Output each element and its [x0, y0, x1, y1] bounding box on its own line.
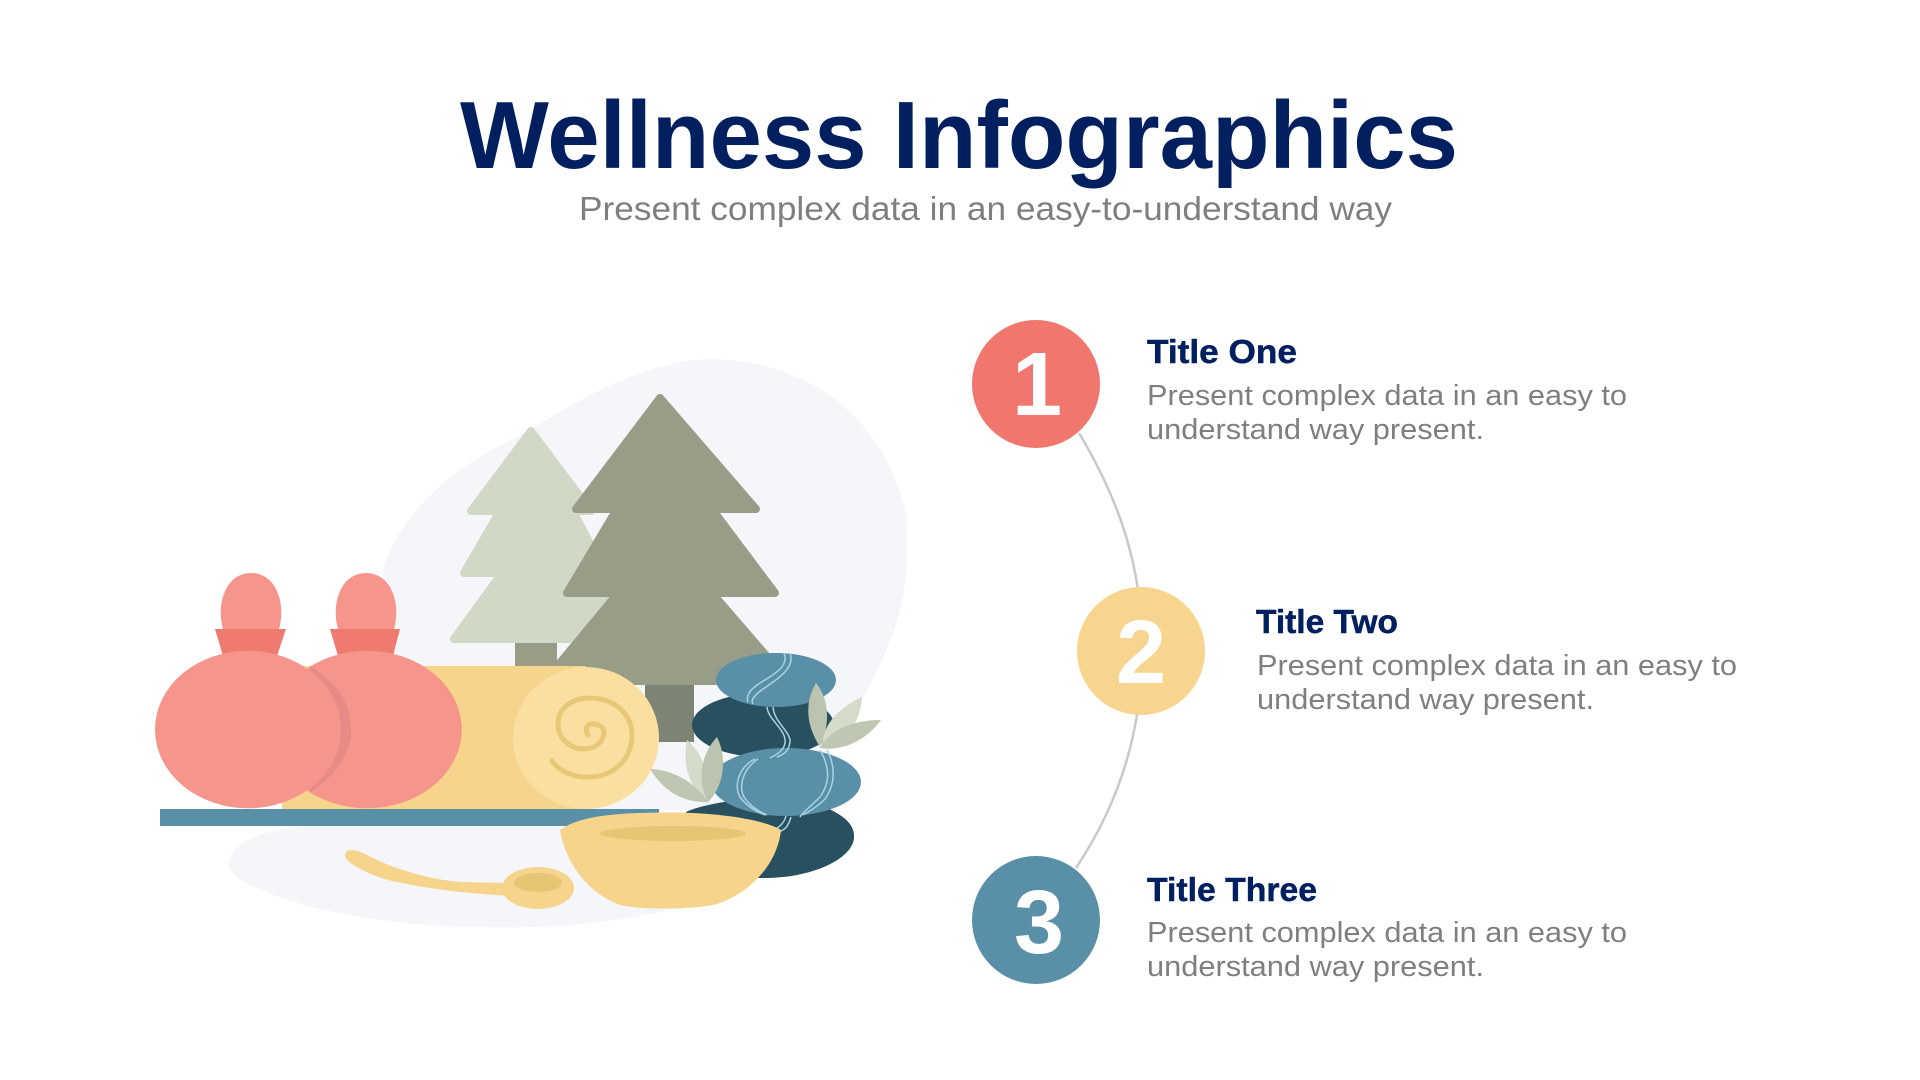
leaf	[650, 769, 708, 802]
top stone	[716, 653, 836, 707]
number badge 2	[1077, 587, 1205, 715]
number badge 1: 1	[1012, 335, 1062, 435]
spoon handle	[345, 850, 510, 896]
bowl body	[560, 812, 781, 909]
subtitle: Present complex data in an easy-to-understand way	[579, 190, 1393, 227]
step 2 title: Title Two	[1256, 603, 1398, 640]
leaf	[820, 720, 881, 749]
number badge 3	[972, 856, 1100, 984]
bottom stone	[686, 797, 854, 878]
step 2	[1077, 587, 1737, 716]
towel body	[282, 666, 586, 809]
light tree foliage	[454, 431, 640, 639]
title: Wellness Infographics	[460, 82, 1458, 189]
background blob	[383, 359, 907, 810]
rolled towel	[282, 666, 659, 809]
ball	[272, 651, 462, 808]
step 3 description: understand way present.	[1147, 951, 1484, 983]
left leaves	[650, 737, 723, 802]
spoon hollow	[514, 873, 562, 892]
spoon head	[502, 867, 574, 909]
cap	[221, 573, 281, 629]
cap	[336, 573, 396, 629]
leaf	[686, 740, 708, 802]
step 2 description: Present complex data in an easy to	[1257, 650, 1737, 682]
step 3	[972, 856, 1627, 984]
spoon	[345, 850, 574, 909]
connecting arc	[1076, 433, 1142, 868]
neck	[330, 629, 400, 656]
ball shadow	[310, 666, 351, 793]
number badge 3: 3	[1014, 873, 1064, 973]
dark tree trunk	[645, 682, 694, 742]
ground ellipse	[229, 826, 733, 927]
dark tree foliage	[545, 398, 788, 681]
stacked stones	[686, 653, 861, 878]
step 3 description: Present complex data in an easy to	[1147, 917, 1627, 949]
bowl	[560, 812, 781, 909]
towel roll end	[513, 667, 659, 809]
step 2 description: understand way present.	[1257, 684, 1594, 716]
dark pine tree	[545, 398, 788, 742]
number badge 2: 2	[1116, 603, 1166, 703]
neck	[215, 629, 286, 656]
right leaves	[808, 683, 881, 749]
number badge 1	[972, 320, 1100, 448]
step 1 description: understand way present.	[1147, 414, 1484, 446]
bowl contents	[600, 826, 746, 841]
stone veins	[737, 653, 833, 832]
step 3 title: Title Three	[1147, 871, 1317, 908]
illustration: wellness spa scene	[155, 359, 907, 927]
light pine tree	[454, 431, 640, 670]
leaf	[822, 697, 862, 748]
third stone	[692, 693, 834, 757]
second stone	[711, 748, 861, 816]
leaf	[702, 737, 723, 802]
light tree trunk	[515, 640, 557, 670]
towel spiral	[552, 698, 632, 777]
step 1	[972, 320, 1627, 448]
step 1 title: Title One	[1147, 333, 1297, 370]
herbal compress ball two	[272, 573, 462, 808]
herbal compress ball one	[155, 573, 341, 808]
ball	[155, 651, 341, 808]
step 1 description: Present complex data in an easy to	[1147, 380, 1627, 412]
leaf	[808, 683, 827, 747]
shelf	[160, 809, 659, 826]
